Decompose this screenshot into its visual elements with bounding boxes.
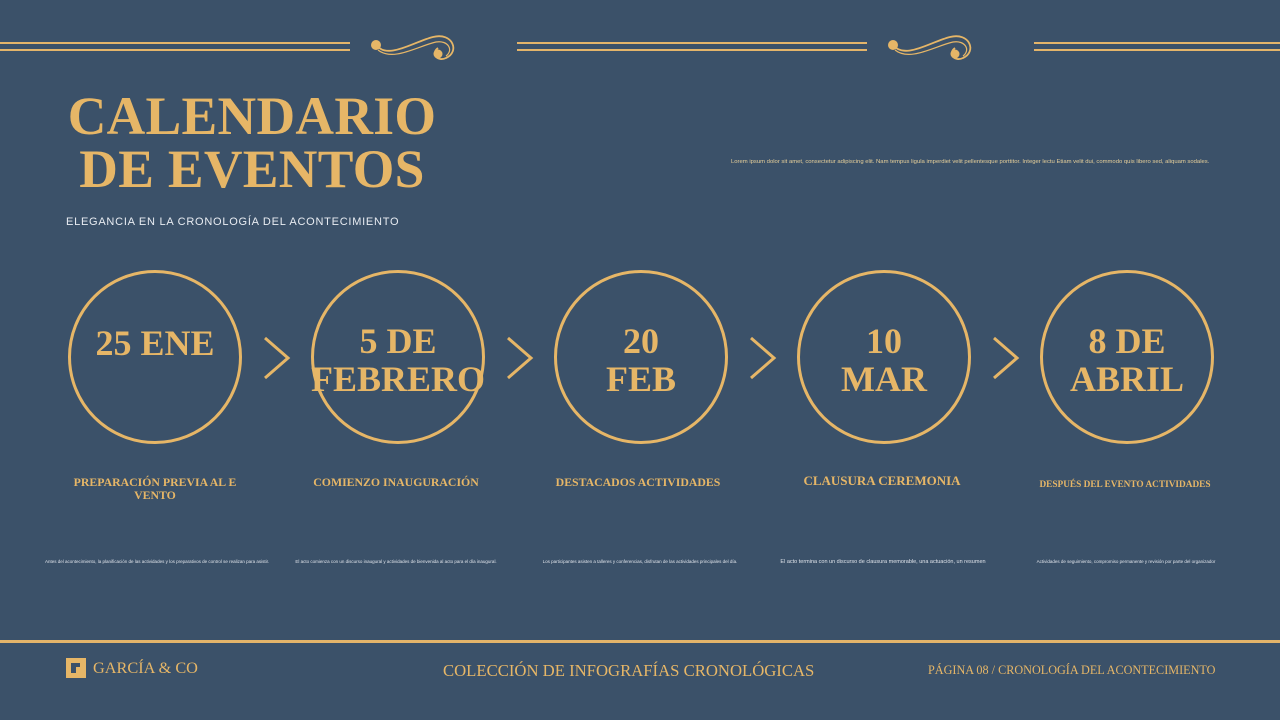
arrow 3 xyxy=(750,337,776,379)
footer logo: GARCÍA & CO xyxy=(93,658,198,677)
desc 2: El acto comienza con un discurso inaugural y actividades de bienvenida al acto para el día inaugural. xyxy=(295,559,497,564)
label 4: CLAUSURA CEREMONIA xyxy=(803,473,961,488)
ornament swirl 2 xyxy=(888,35,972,60)
label 5: DESPUÉS DEL EVENTO ACTIVIDADES xyxy=(1039,480,1211,490)
desc 4: El acto termina con un discurso de clausura memorable, una actuación, un resumen xyxy=(780,559,986,565)
desc 1: Antes del acontecimiento, la planificación de las actividades y los preparativos de control se realizan para asistir. xyxy=(45,559,269,564)
circle 1: 25 ENE xyxy=(95,323,215,363)
footer center: COLECCIÓN DE INFOGRAFÍAS CRONOLÓGICAS xyxy=(443,661,814,680)
desc 3: Los participantes asisten a talleres y conferencias, disfrutan de las actividades principales del día. xyxy=(543,559,737,564)
label 2: COMIENZO INAUGURACIÓN xyxy=(313,475,479,489)
title xyxy=(68,86,436,199)
circle 2 xyxy=(311,270,485,444)
circle 5 xyxy=(1040,270,1214,444)
circle 1 xyxy=(68,270,242,444)
circle 2: 5 DE xyxy=(359,321,436,361)
circle 4: MAR xyxy=(841,359,927,399)
footer divider xyxy=(0,640,1280,643)
label 1: PREPARACIÓN PREVIA AL E xyxy=(74,475,236,489)
circle 5: ABRIL xyxy=(1070,359,1184,399)
arrow 2 xyxy=(507,337,534,379)
circle 3: 20 xyxy=(623,321,659,361)
title: CALENDARIO xyxy=(68,86,436,146)
circle 3 xyxy=(554,270,728,444)
arrow 1 xyxy=(264,337,290,379)
circle 4 xyxy=(797,270,971,444)
label 1 xyxy=(74,475,236,502)
ornament swirl 1 xyxy=(371,35,454,60)
intro text: Lorem ipsum dolor sit amet, consectetur adipiscing elit. Nam tempus ligula imperdiet velit pellentesque porttitor. Integer lectu Etiam velit dui, commodo quis libero sed, aliquam sodales. xyxy=(731,159,1209,165)
footer right: PÁGINA 08 / CRONOLOGÍA DEL ACONTECIMIENTO xyxy=(928,663,1215,677)
label 1: VENTO xyxy=(134,488,176,502)
circle 4: 10 xyxy=(866,321,902,361)
title: DE EVENTOS xyxy=(79,139,425,199)
top ornament border xyxy=(0,42,1280,51)
circle 5: 8 DE xyxy=(1088,321,1166,361)
label 3: DESTACADOS ACTIVIDADES xyxy=(556,475,720,489)
desc 5: Actividades de seguimiento, compromiso permanente y revisión por parte del organizador xyxy=(1037,559,1215,564)
subtitle: ELEGANCIA EN LA CRONOLOGÍA DEL ACONTECIMIENTO xyxy=(66,216,399,228)
circle 3: FEB xyxy=(606,359,676,399)
circle 2: FEBRERO xyxy=(311,359,485,399)
arrow 4 xyxy=(993,337,1020,379)
